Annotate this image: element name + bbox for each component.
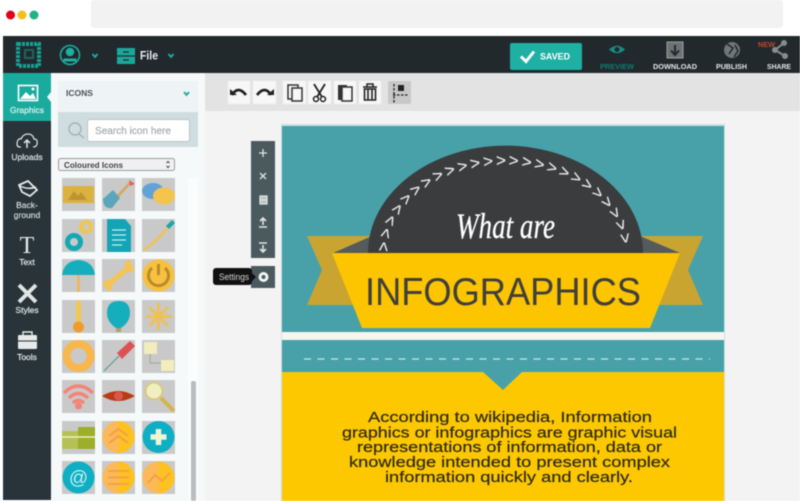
icon: chevron [168,54,174,57]
icon: document [102,219,135,252]
publish action [716,42,747,71]
icon: linked nodes [142,340,175,373]
icon: copy [283,81,306,104]
sidebar item: text [19,233,35,267]
preview action [600,46,635,71]
preview action: PREVIEW [600,62,635,71]
download action: DOWNLOAD [653,62,698,71]
sidebar item: background: ground [14,210,41,220]
icon library panel [51,73,205,501]
icon set dropdown: Coloured Icons [64,160,123,170]
heading: what are: What are [456,206,555,246]
chevrons along dome: >>>>>>>>>>>>>>>>>>>>>>>>> [378,155,630,252]
sidebar item: styles [15,285,39,315]
browser window dots [6,10,38,20]
icon: grid [260,196,267,204]
white stripe [282,332,724,340]
browser address bar [91,0,783,28]
icon: at sign: @ [69,468,88,489]
icon: toothbrush [142,219,175,252]
dome [368,146,643,253]
icon: add [259,149,267,157]
yellow text panel [282,372,724,501]
download action [653,42,698,71]
icon: scissors [308,81,331,104]
description text: information quickly and clearly. [385,469,633,486]
yellow ribbon [332,253,680,328]
icon: lifebuoy [62,340,95,373]
sidebar item: tools: Tools [17,352,37,362]
icon: picture [62,178,95,211]
sidebar item: background [14,181,41,220]
description text: graphics or infographics are graphic visual [342,424,677,442]
sidebar item: text: Text [19,257,35,267]
icon: redo [253,81,276,104]
icon: align [388,81,411,104]
icon: plus [142,421,175,454]
file menu label: File [140,48,158,62]
search box: Search icon here [95,126,171,137]
icon: close [260,173,266,179]
icon: power button [142,259,175,292]
sidebar item: uploads: Uploads [11,152,43,162]
description text: representations of information, data or [357,439,662,456]
icon: magnifier [142,380,175,413]
sidebar item: graphics: Graphics [10,105,44,115]
sidebar item: text: T [20,233,35,259]
description text [342,409,677,486]
scrollbar [188,178,198,501]
saved button [510,43,582,70]
description text: According to wikipedia, Information [368,409,652,426]
icon: double chevron [102,421,135,454]
notch pointer [483,372,522,390]
floating layer toolbar [251,141,275,258]
settings tooltip [213,268,256,285]
top teal background [282,126,724,332]
icon: thermometer [62,300,95,333]
settings button [251,266,275,288]
teal divider band [282,340,724,372]
icon: list lines [102,461,135,494]
ribbon tails [307,236,703,305]
icon: toolbox [62,421,95,454]
icon: umbrella [62,259,95,292]
canvas area [205,111,800,501]
icon: speech bubbles [142,178,175,211]
sidebar item: background: Back- [16,200,38,210]
icon: gears [62,219,95,252]
panel heading: ICONS [66,88,93,98]
icon set dropdown [58,158,174,170]
icon: chevron [92,54,98,57]
share action [758,40,791,71]
heading: infographics: INFOGRAPHICS [365,271,641,314]
settings tooltip: Settings [219,272,249,282]
icon: send down [259,243,267,252]
panel heading [58,81,198,112]
sidebar item: styles: Styles [15,305,39,315]
icon: shovel [102,178,135,211]
icon: logo [18,44,39,66]
infographic preview [280,124,726,501]
sidebar item: tools [17,332,37,362]
ribbon folds [333,236,680,253]
icon grid [62,178,175,494]
icon: balloon [102,300,135,333]
icon: paste [334,81,356,104]
editing toolbar [205,73,800,111]
icon: wifi [62,380,95,413]
sidebar item: graphics [3,73,51,121]
description text: knowledge intended to present complex [349,454,671,471]
icon: user [60,46,80,64]
saved button: SAVED [540,52,570,62]
icon: at sign [62,461,95,494]
icon: undo [228,81,250,104]
sidebar item: uploads [11,134,43,162]
left sidebar [3,73,51,500]
icon: trend line [142,461,175,494]
search box [58,112,198,147]
share action: NEW [758,42,775,49]
icon: bring up [259,218,267,227]
publish action: PUBLISH [716,62,747,71]
icon: screwdriver [102,340,135,373]
share action: SHARE [767,62,791,71]
app header bar [3,36,800,73]
icon: wrench [102,259,135,292]
icon: trash [359,81,381,104]
icon: snowflake [142,300,175,333]
icon: file cabinet [117,48,135,64]
icon: eye [102,380,135,413]
